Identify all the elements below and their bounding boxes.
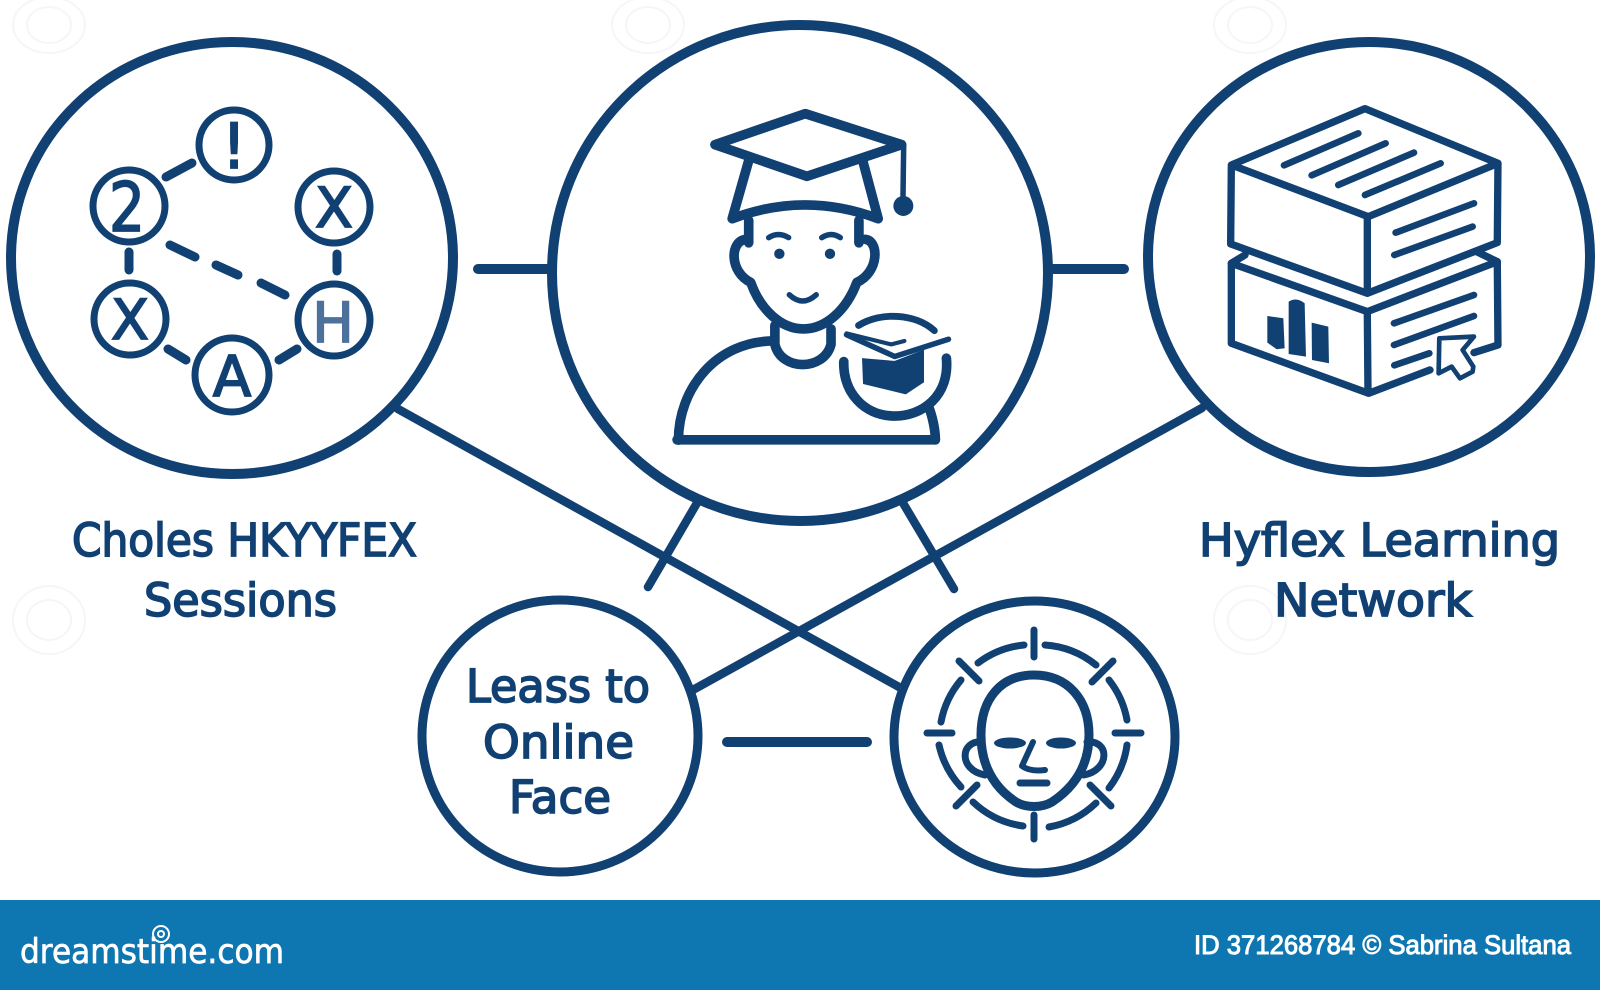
icon: node network: A [213, 345, 251, 410]
icon: node network: H [312, 291, 354, 355]
connector: left circle to centre circle [478, 264, 548, 274]
heading: right label: Hyflex Learning [1199, 514, 1560, 567]
heading: left label: Choles HKYYFEX [72, 514, 417, 567]
panel: lower left text circle [422, 600, 698, 872]
icon: node network: X [111, 288, 149, 352]
icon: graduate student [677, 114, 948, 440]
icon: node network: X [315, 176, 353, 240]
connector: centre circle to right circle [1052, 264, 1124, 274]
heading: left label [72, 514, 417, 627]
icon: stacked data blocks [1231, 109, 1498, 393]
icon: logo spiral [153, 926, 169, 942]
heading: left label: Sessions [144, 574, 337, 627]
heading: right label: Network [1274, 574, 1472, 627]
chart: bar glyph [1267, 299, 1329, 363]
icon: node network: ! [222, 110, 246, 183]
connector: right circle to text circle [691, 408, 1202, 691]
panel: right circle learning network [1148, 42, 1590, 472]
text: logo wordmark: dreamstime.com [20, 932, 284, 972]
text: image credit: ID 371268784 © Sabrina Sultana [1194, 930, 1572, 960]
connector: text circle to face circle [727, 737, 867, 747]
icon: face target [927, 630, 1141, 839]
heading: right label [1199, 514, 1560, 627]
icon: small cap badge [843, 315, 948, 418]
connector: centre circle left leg [648, 503, 697, 587]
icon: node network: 2 [109, 169, 145, 248]
text: circle caption: Face [509, 771, 611, 824]
connector: centre circle right leg [903, 503, 954, 589]
panel: centre circle student [552, 25, 1048, 521]
icon: node network [93, 110, 370, 412]
panel: left circle sessions [11, 42, 453, 474]
panel: lower right face circle [894, 601, 1175, 873]
text: circle caption: Leass to [466, 660, 650, 713]
connector: left circle to face circle [398, 409, 899, 687]
text: circle caption: Online [483, 716, 634, 769]
footer banner [0, 900, 1600, 990]
icon: cursor arrow [1439, 337, 1474, 378]
text: circle caption [466, 660, 650, 824]
